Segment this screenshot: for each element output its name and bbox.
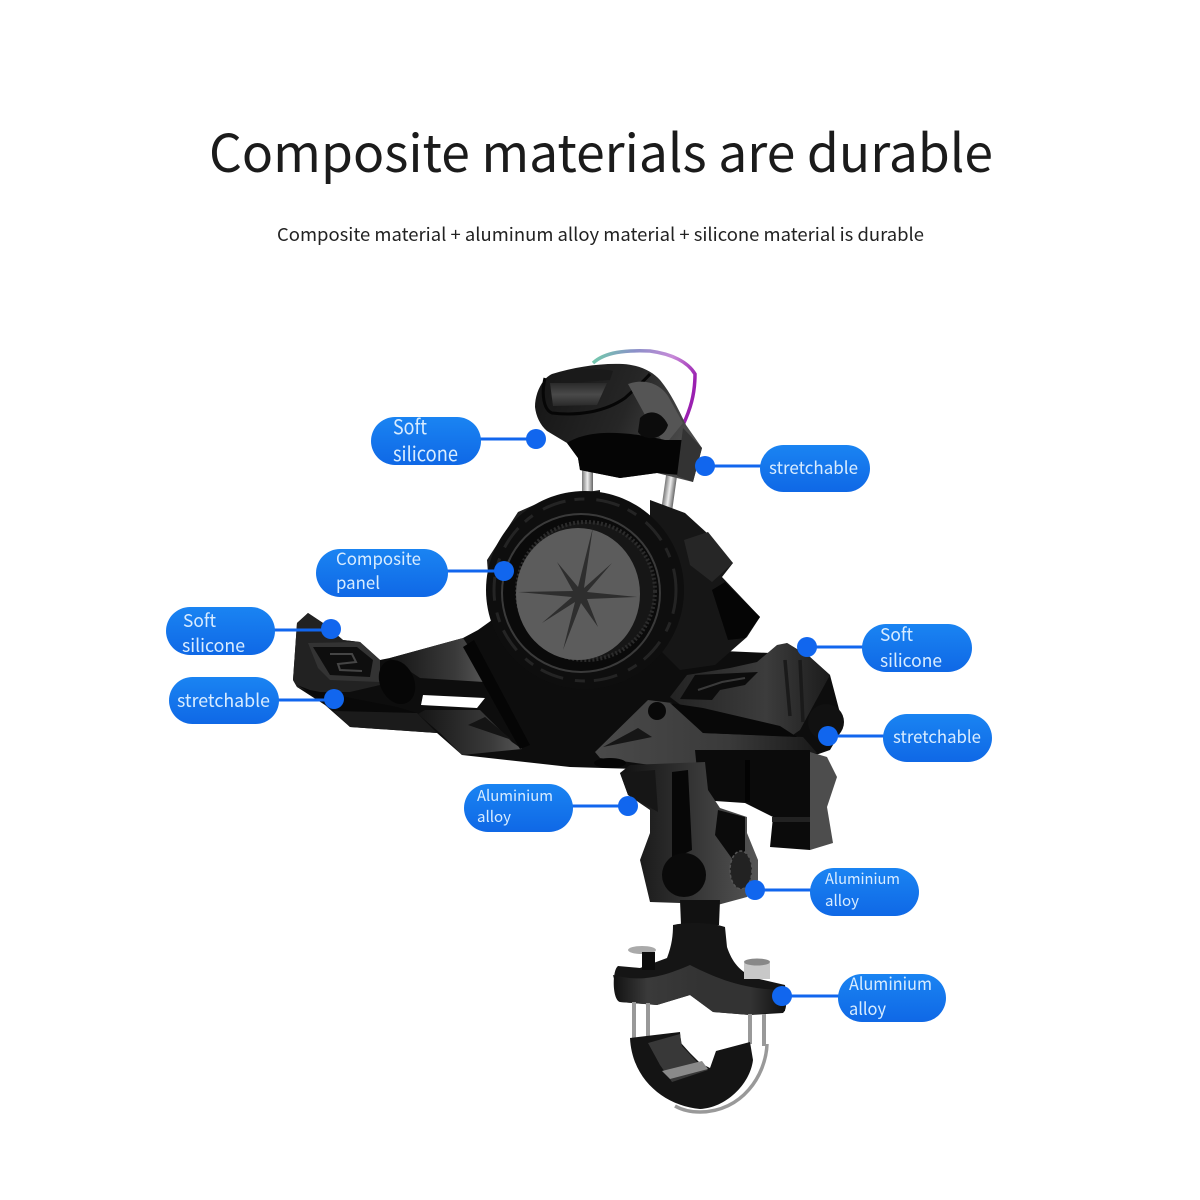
eight point star: [518, 527, 637, 650]
gray center plate: [516, 528, 640, 660]
callout: stretchable left: [169, 677, 344, 724]
callout: soft silicone left: [166, 607, 341, 658]
callout: stretchable top: stretchable: [769, 454, 858, 479]
pivot block: [620, 762, 758, 907]
left gripper arm: [293, 613, 530, 755]
callout: soft silicone right: [797, 621, 972, 673]
callout: aluminium alloy lower: Aluminium: [849, 970, 932, 995]
callout: stretchable left: stretchable: [177, 687, 270, 713]
knob lever: [695, 750, 837, 850]
callout: stretchable right: stretchable: [893, 723, 981, 748]
slot window in left arm: [421, 695, 485, 708]
right gripper arm: [670, 643, 844, 740]
callout: aluminium alloy upper: alloy: [477, 806, 511, 827]
silver u-bolt: [675, 1044, 767, 1112]
lower wedge of right arm: [594, 700, 817, 770]
callout: aluminium alloy lower: [772, 970, 946, 1022]
callout: aluminium alloy lower: alloy: [849, 995, 886, 1020]
callout: composite panel: Composite: [336, 545, 421, 570]
clamp bolts: [628, 946, 770, 979]
callout: aluminium alloy middle: Aluminium: [825, 868, 900, 889]
callout: aluminium alloy upper: Aluminium: [477, 785, 553, 806]
callout: soft silicone right: silicone: [880, 647, 942, 673]
title: Composite materials are durable: [209, 112, 993, 187]
right side gripper chunks behind disk: [650, 500, 760, 670]
callout: stretchable right: [818, 714, 992, 762]
callout: aluminium alloy upper: [464, 784, 638, 832]
handlebar clamp: [613, 900, 786, 1112]
callout: stretchable top: [695, 445, 870, 492]
body silhouette: [293, 600, 840, 770]
iridescent wire: [593, 351, 695, 425]
phone mount product illustration: [293, 351, 844, 1112]
callout: aluminium alloy middle: [745, 868, 919, 916]
callout: soft silicone top: Soft: [393, 411, 427, 440]
callout: soft silicone left: Soft: [183, 607, 216, 633]
upper silver posts: [582, 465, 678, 513]
round holder disk: [486, 490, 684, 689]
callout: soft silicone top: silicone: [393, 438, 458, 467]
callout: soft silicone right: Soft: [880, 621, 913, 647]
callout: composite panel: panel: [336, 569, 380, 594]
u-bolt rods: [632, 1002, 766, 1046]
callout: soft silicone left: silicone: [182, 632, 245, 658]
callout: composite panel: [316, 545, 514, 597]
callout: aluminium alloy middle: alloy: [825, 890, 859, 911]
subtitle: Composite material + aluminum alloy material + silicone material is durable: [277, 221, 924, 247]
top clamp head: [535, 364, 702, 482]
callout: soft silicone top: [371, 411, 546, 467]
rubber cradle: [630, 1032, 753, 1109]
